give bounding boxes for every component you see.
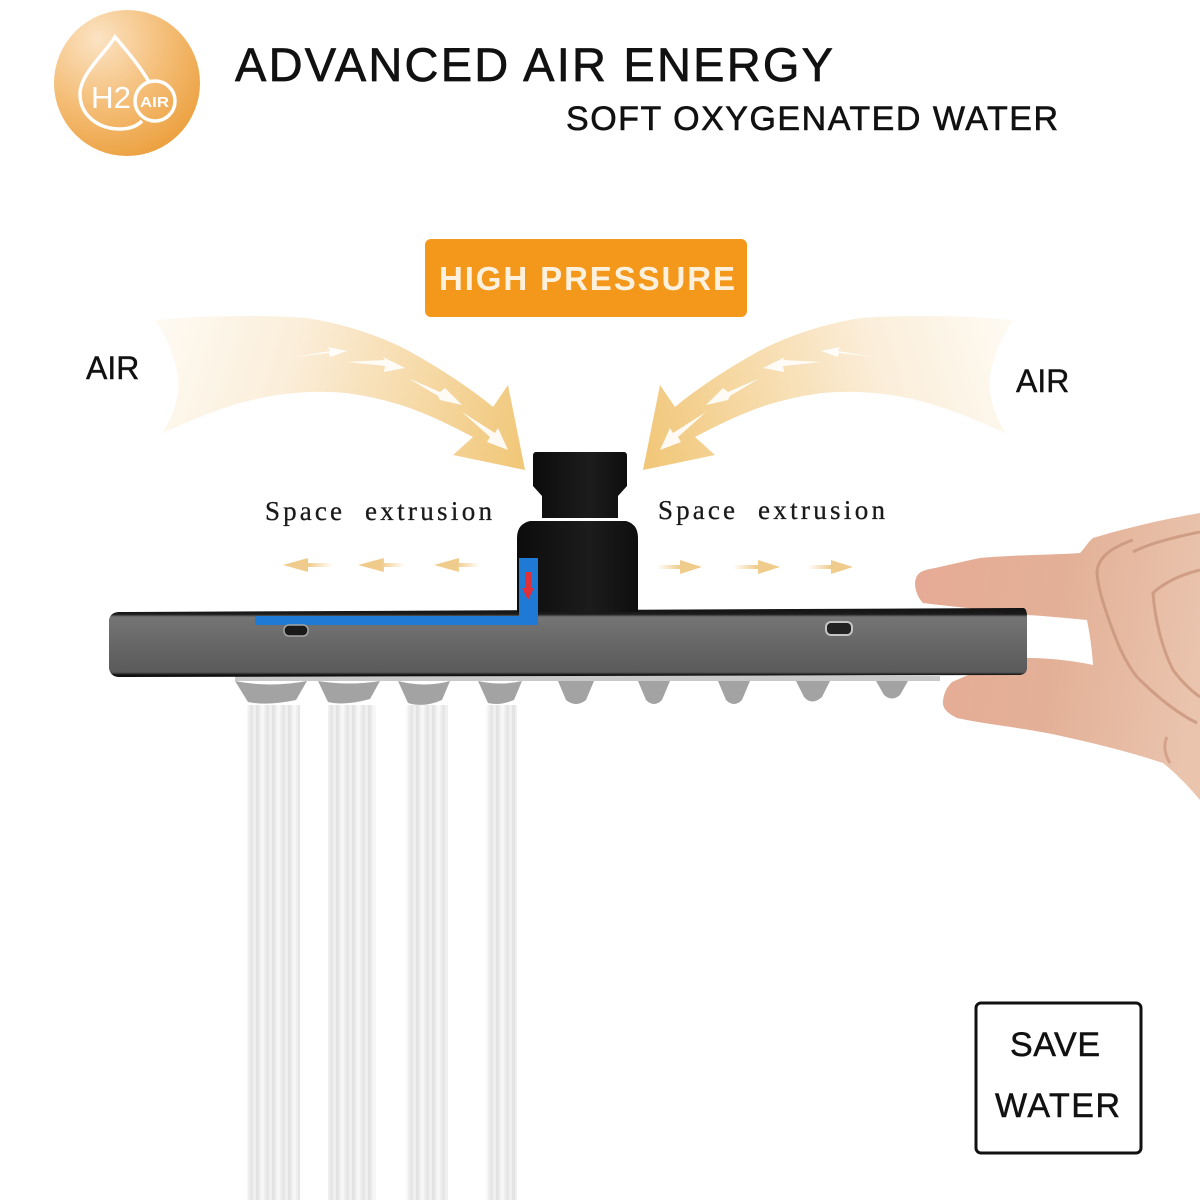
arrows: right extrusion	[657, 560, 853, 574]
side vent right	[826, 622, 852, 635]
high pressure label	[425, 239, 747, 317]
high pressure label: HIGH PRESSURE	[439, 260, 735, 297]
side vent left	[284, 625, 308, 636]
shower head plate	[109, 608, 1027, 677]
text: space extrusion right: extrusion	[758, 495, 886, 525]
arrow: left air flow	[155, 316, 525, 470]
subtitle: SOFT OXYGENATED WATER	[566, 100, 1058, 138]
label: air right: AIR	[1016, 363, 1069, 399]
icon: H2 air badge: AIR	[140, 94, 169, 111]
label: air left: AIR	[86, 350, 139, 386]
silver rim under plate	[235, 676, 940, 681]
hand	[915, 513, 1200, 800]
save water box	[976, 1003, 1141, 1153]
title: ADVANCED AIR ENERGY	[235, 38, 833, 91]
nozzles	[235, 681, 908, 705]
blue water channel	[255, 558, 538, 625]
arrows: left extrusion	[283, 558, 480, 572]
water streams	[247, 705, 517, 1200]
save water box: WATER	[995, 1087, 1120, 1125]
red flow arrow	[522, 572, 534, 600]
arrow: right air flow	[643, 316, 1013, 470]
save water box: SAVE	[1010, 1026, 1100, 1064]
icon: H2 air badge	[54, 10, 200, 156]
text: space extrusion right: Space	[658, 495, 735, 525]
text: space extrusion left: Space	[265, 496, 342, 526]
icon: H2 air badge: H2	[91, 80, 131, 115]
shower connector	[517, 452, 638, 612]
text: space extrusion left: extrusion	[365, 496, 492, 526]
